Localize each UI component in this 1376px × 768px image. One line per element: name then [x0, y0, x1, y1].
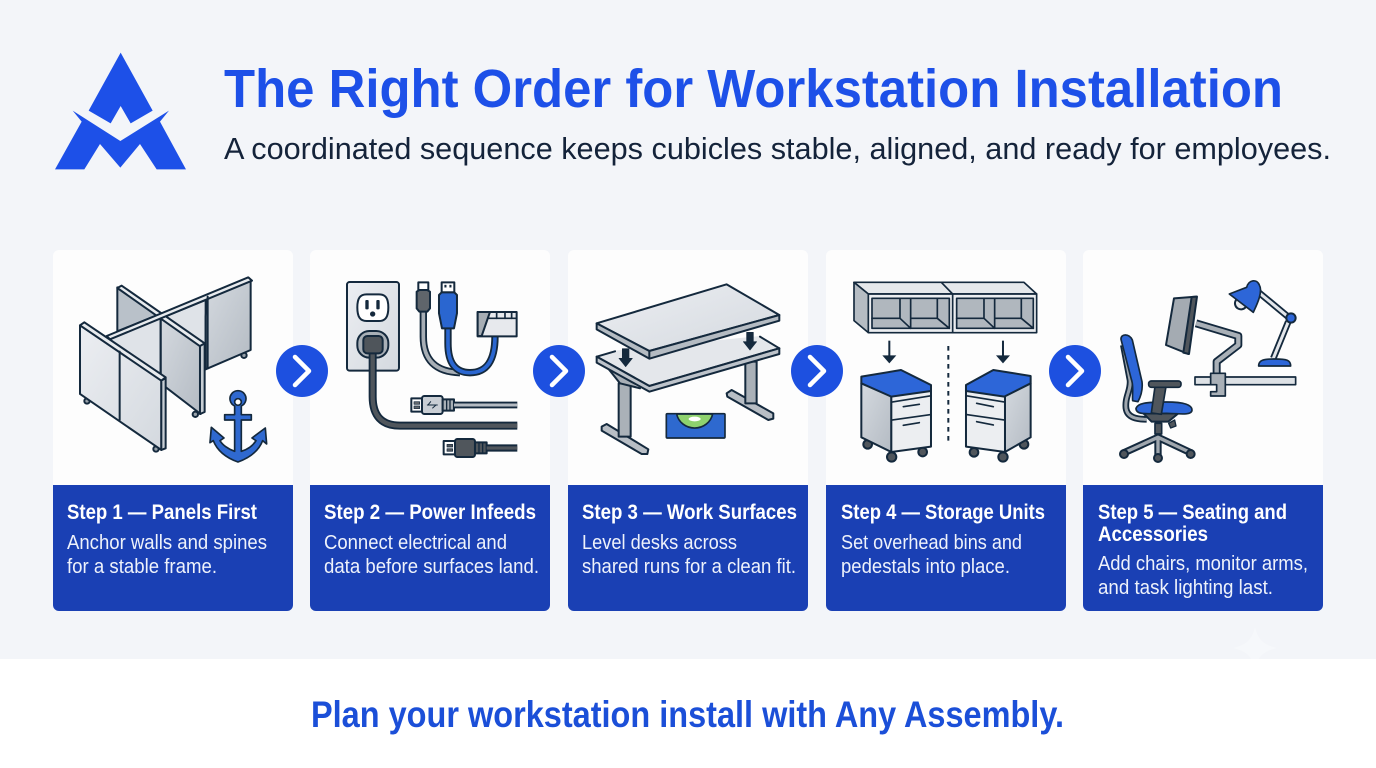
- step 5 heading: Step 5 — Seating and: [1098, 501, 1287, 524]
- step 4 description: Set overhead bins and: [841, 532, 1022, 554]
- icon: cubicle panels and anchor: [80, 277, 267, 462]
- step 5 heading: Accessories: [1098, 523, 1208, 546]
- step 2 description: data before surfaces land.: [324, 556, 539, 578]
- arrow 2: [533, 345, 585, 397]
- icon: desk and level: [597, 284, 779, 454]
- step 5 heading: [1098, 501, 1287, 546]
- step 4 heading: Step 4 — Storage Units: [841, 501, 1045, 524]
- arrow 1: [276, 345, 328, 397]
- sparkle watermark: [1233, 627, 1277, 669]
- step 1 description: Anchor walls and spines: [67, 532, 267, 554]
- arrow 4: [1049, 345, 1101, 397]
- subtitle: A coordinated sequence keeps cubicles stable, aligned, and ready for employees.: [224, 131, 1331, 166]
- step 1 description: for a stable frame.: [67, 556, 217, 578]
- step 3 heading: Step 3 — Work Surfaces: [582, 501, 797, 524]
- step 5 description: [1098, 553, 1308, 599]
- step 5 description: and task lighting last.: [1098, 577, 1273, 599]
- icon: outlet and cables: [347, 282, 517, 457]
- panel: step 1: [53, 250, 293, 611]
- panel: step 5: [1083, 250, 1323, 611]
- title: The Right Order for Workstation Installation: [224, 59, 1283, 119]
- icon: overhead bins and pedestals: [854, 282, 1037, 462]
- panel: step 4: [826, 250, 1066, 611]
- footer call to action: Plan your workstation install with Any Assembly.: [311, 694, 1064, 735]
- step 3 description: [582, 532, 796, 578]
- step 4 description: pedestals into place.: [841, 556, 1010, 578]
- logo: [55, 53, 186, 169]
- step 1 heading: Step 1 — Panels First: [67, 501, 257, 524]
- step 2 heading: Step 2 — Power Infeeds: [324, 501, 536, 524]
- step 2 description: Connect electrical and: [324, 532, 507, 554]
- footer band: [0, 659, 1376, 768]
- step 2 description: [324, 532, 539, 578]
- step 4 description: [841, 532, 1022, 578]
- step 3 description: shared runs for a clean fit.: [582, 556, 796, 578]
- step 1 description: [67, 532, 267, 578]
- panel: step 3: [568, 250, 808, 611]
- step 3 description: Level desks across: [582, 532, 737, 554]
- arrow 3: [791, 345, 843, 397]
- icon: chair, monitor arm and lamp: [1120, 281, 1296, 462]
- step 5 description: Add chairs, monitor arms,: [1098, 553, 1308, 575]
- panel: step 2: [310, 250, 550, 611]
